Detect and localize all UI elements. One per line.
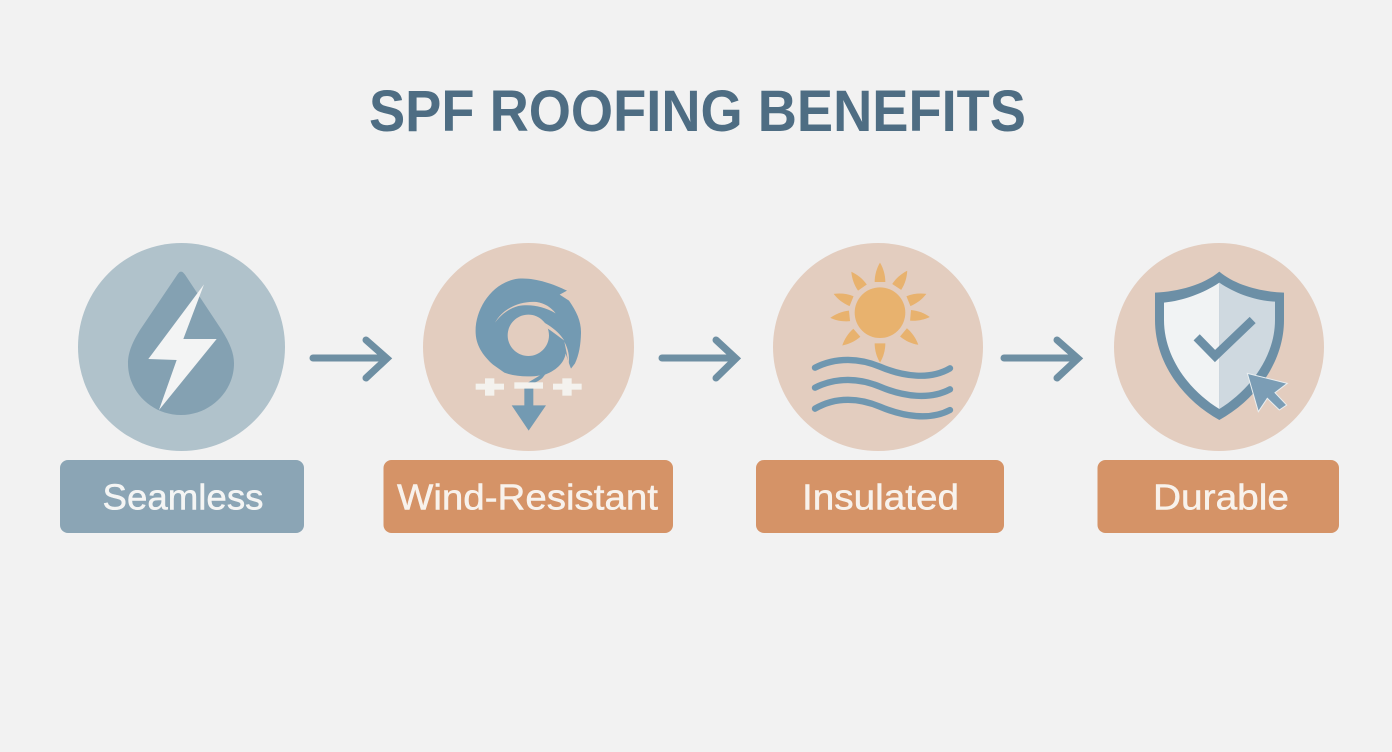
- icon circle: insulated: [773, 243, 983, 451]
- panel: wind-resistant: [384, 243, 673, 533]
- label: wind-resistant: Wind-Resistant: [397, 476, 658, 518]
- title: SPF ROOFING BENEFITS: [369, 79, 1026, 144]
- arrow: wind-resistant to insulated: [662, 340, 736, 378]
- arrow: insulated to durable: [1004, 340, 1078, 378]
- panel: insulated: [756, 243, 1004, 533]
- panel: seamless: [60, 243, 304, 533]
- icon: sun and waves: [815, 263, 950, 416]
- label: insulated: Insulated: [802, 476, 959, 518]
- icon circle: durable: [1114, 243, 1324, 451]
- label: durable: Durable: [1153, 476, 1289, 518]
- icon circle: seamless: [78, 243, 285, 451]
- label: durable: [1098, 460, 1339, 533]
- icon: water drop with lightning bolt: [128, 272, 234, 415]
- panel: durable: [1098, 243, 1339, 533]
- arrow: seamless to wind-resistant: [313, 340, 387, 378]
- label: insulated: [756, 460, 1004, 533]
- icon circle: wind-resistant: [423, 243, 634, 451]
- icon: shield with check and cursor: [1155, 272, 1287, 420]
- icon: hurricane with arrow: [476, 278, 582, 431]
- label: seamless: Seamless: [102, 476, 264, 518]
- label: wind-resistant: [384, 460, 673, 533]
- label: seamless: [60, 460, 304, 533]
